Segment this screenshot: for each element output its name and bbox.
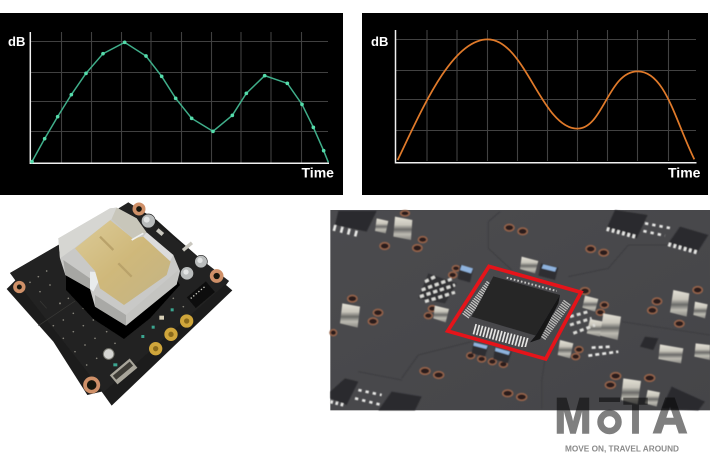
black header connector [187, 281, 215, 308]
highlighted chip [465, 276, 567, 343]
translucent case [58, 208, 180, 326]
blue-topped components [458, 263, 558, 363]
logo letter T: T [624, 388, 648, 444]
chip package [472, 276, 560, 336]
metal capacitors and resistors [340, 217, 710, 407]
dark IC packages [330, 210, 708, 410]
y-axis label: dB [8, 34, 25, 49]
gold coax connectors [151, 316, 191, 353]
photo: circuit board with transparent module [7, 202, 232, 406]
x-axis label: Time [668, 164, 701, 180]
capacitors [141, 214, 207, 280]
logo letter M: M [554, 388, 592, 444]
red highlight frame [448, 266, 581, 359]
white LED [103, 349, 114, 359]
gold heat spreader [75, 220, 171, 305]
board base [7, 202, 232, 406]
green parts [113, 308, 174, 366]
flat cable connector [110, 358, 137, 384]
x-axis label: Time [302, 164, 334, 180]
small parts top right [156, 228, 193, 252]
logo: MOTA wordmark [554, 388, 688, 444]
green sampled line with points [30, 40, 328, 163]
orange continuous curve [398, 39, 694, 160]
chip pins [465, 278, 567, 343]
mounting holes [15, 204, 222, 392]
board solder dots [29, 270, 184, 366]
black module base [66, 238, 180, 339]
logo letter A: A [652, 388, 688, 444]
copper-ringed vias [330, 211, 702, 400]
panel: smooth analogue waveform chart [362, 13, 708, 195]
logo letter O with macron [599, 398, 620, 431]
IC pins [330, 223, 697, 405]
resistor arrays [418, 273, 595, 333]
panel: stepped digital waveform chart [0, 13, 343, 195]
chart axes [30, 32, 329, 163]
logo tagline: MOVE ON, TRAVEL AROUND [565, 444, 679, 454]
photo: PCB close-up with highlighted chip [330, 210, 710, 410]
board seam lines [38, 301, 75, 326]
chart axes [396, 30, 696, 163]
y-axis label: dB [371, 34, 388, 49]
traces [358, 212, 710, 408]
